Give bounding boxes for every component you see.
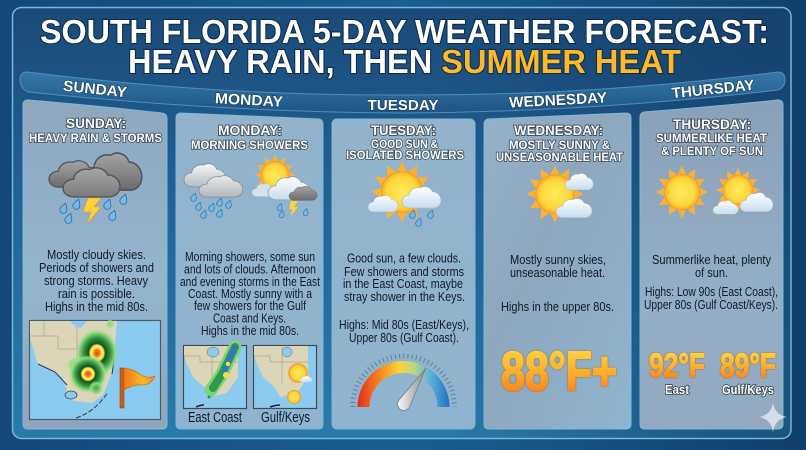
body text: stray shower in the Keys. [344, 289, 465, 304]
heading: WEDNESDAY: [514, 123, 603, 138]
map: Gulf/Keys [254, 346, 316, 408]
body text: rain is possible. [58, 286, 135, 301]
body text: few showers for the Gulf [194, 298, 306, 313]
body text: unseasonable heat. [510, 265, 605, 280]
big temperature: 88°F+: 88°F+ [501, 340, 617, 402]
body text: Periods of showers and [39, 260, 154, 275]
body text: Summerlike heat, plenty [652, 252, 771, 267]
body text: Coast. Mostly sunny with a [188, 286, 313, 301]
label: Sunday: SUNDAY [62, 78, 128, 101]
panel background [332, 119, 475, 429]
icon: sun and clouds [368, 161, 441, 227]
label: Wednesday: WEDNESDAY [509, 89, 607, 112]
body text: Morning showers, some sun [185, 249, 315, 264]
day labels [62, 77, 755, 114]
icon: sun and storm cloud [252, 155, 317, 218]
body text: Coast and Keys. [213, 310, 286, 326]
panel: Thursday [640, 100, 783, 429]
subheading line 2: ISOLATED SHOWERS [346, 150, 464, 162]
heading: TUESDAY: [371, 123, 436, 138]
body text: Upper 80s (Gulf Coast). [349, 330, 459, 345]
title line 1: SOUTH FLORIDA 5-DAY WEATHER FORECAST: [40, 13, 769, 50]
map: East Coast [184, 346, 246, 408]
icon: sun [656, 166, 708, 218]
body text [39, 247, 154, 314]
body text: Highs: Mid 80s (East/Keys), [339, 317, 469, 332]
panel: Tuesday [332, 119, 475, 429]
body text: Mostly cloudy skies. [47, 247, 146, 262]
body text: Highs in the mid 80s. [45, 299, 148, 314]
icon: orange flag [120, 368, 155, 408]
body text [501, 252, 614, 314]
label: Monday: MONDAY [215, 90, 283, 111]
temperature gauge [352, 356, 454, 410]
heading: THURSDAY: [673, 117, 751, 132]
body text [644, 252, 778, 312]
heading: MONDAY: [218, 123, 282, 138]
body text: Highs in the mid 80s. [201, 323, 299, 338]
panel: Monday [176, 113, 323, 429]
body text: Highs in the upper 80s. [501, 299, 614, 314]
radar map [30, 320, 160, 420]
label: East: East [665, 383, 690, 397]
temperature: East 92°F: 92°F [649, 347, 705, 385]
icon: rain cloud [184, 164, 243, 219]
heading: SUNDAY: [66, 116, 126, 131]
body text: of sun. [695, 265, 728, 280]
label: Tuesday: TUESDAY [368, 97, 438, 114]
body text: and lots of clouds. Afternoon [184, 262, 316, 276]
temperature: Gulf/Keys 89°F: 89°F [720, 347, 776, 385]
day ribbon [20, 72, 785, 113]
panel background [640, 100, 783, 429]
body text [339, 250, 469, 345]
body text: and evening storms in the East [180, 274, 320, 289]
subheading: SUMMERLIKE HEAT [656, 133, 767, 145]
sparkle mark [759, 403, 787, 432]
subheading: MORNING SHOWERS [191, 140, 308, 152]
map label: Gulf/Keys: Gulf/Keys [261, 410, 310, 426]
body text: Good sun, a few clouds. [347, 250, 461, 266]
body text [180, 249, 320, 338]
subheading: GOOD SUN & [371, 139, 438, 151]
subheading: HEAVY RAIN & STORMS [29, 133, 162, 145]
panel: Sunday [23, 100, 167, 429]
subheading: MOSTLY SUNNY & [509, 140, 610, 152]
body text: Few showers and storms [344, 264, 464, 279]
body text: Mostly sunny skies, [510, 252, 606, 267]
panel background [176, 113, 323, 429]
body text: in the East Coast, maybe [343, 276, 463, 291]
panel: Wednesday [484, 113, 631, 429]
title [40, 13, 769, 80]
panel background [484, 113, 631, 429]
icon: sun and clouds [526, 165, 593, 223]
subheading line 2: & PLENTY OF SUN [661, 146, 763, 158]
icon: storm cloud [49, 153, 142, 224]
icon: sun with clouds [713, 168, 773, 214]
label: Thursday: THURSDAY [671, 77, 755, 102]
title line 2: HEAVY RAIN, THEN SUMMER HEAT [128, 43, 681, 80]
subheading line 2: UNSEASONABLE HEAT [496, 152, 623, 164]
label: Gulf/Keys: Gulf/Keys [722, 383, 774, 397]
body text: strong storms. Heavy [44, 273, 148, 288]
map label: East Coast: East Coast [188, 410, 242, 426]
panel background [23, 100, 167, 429]
